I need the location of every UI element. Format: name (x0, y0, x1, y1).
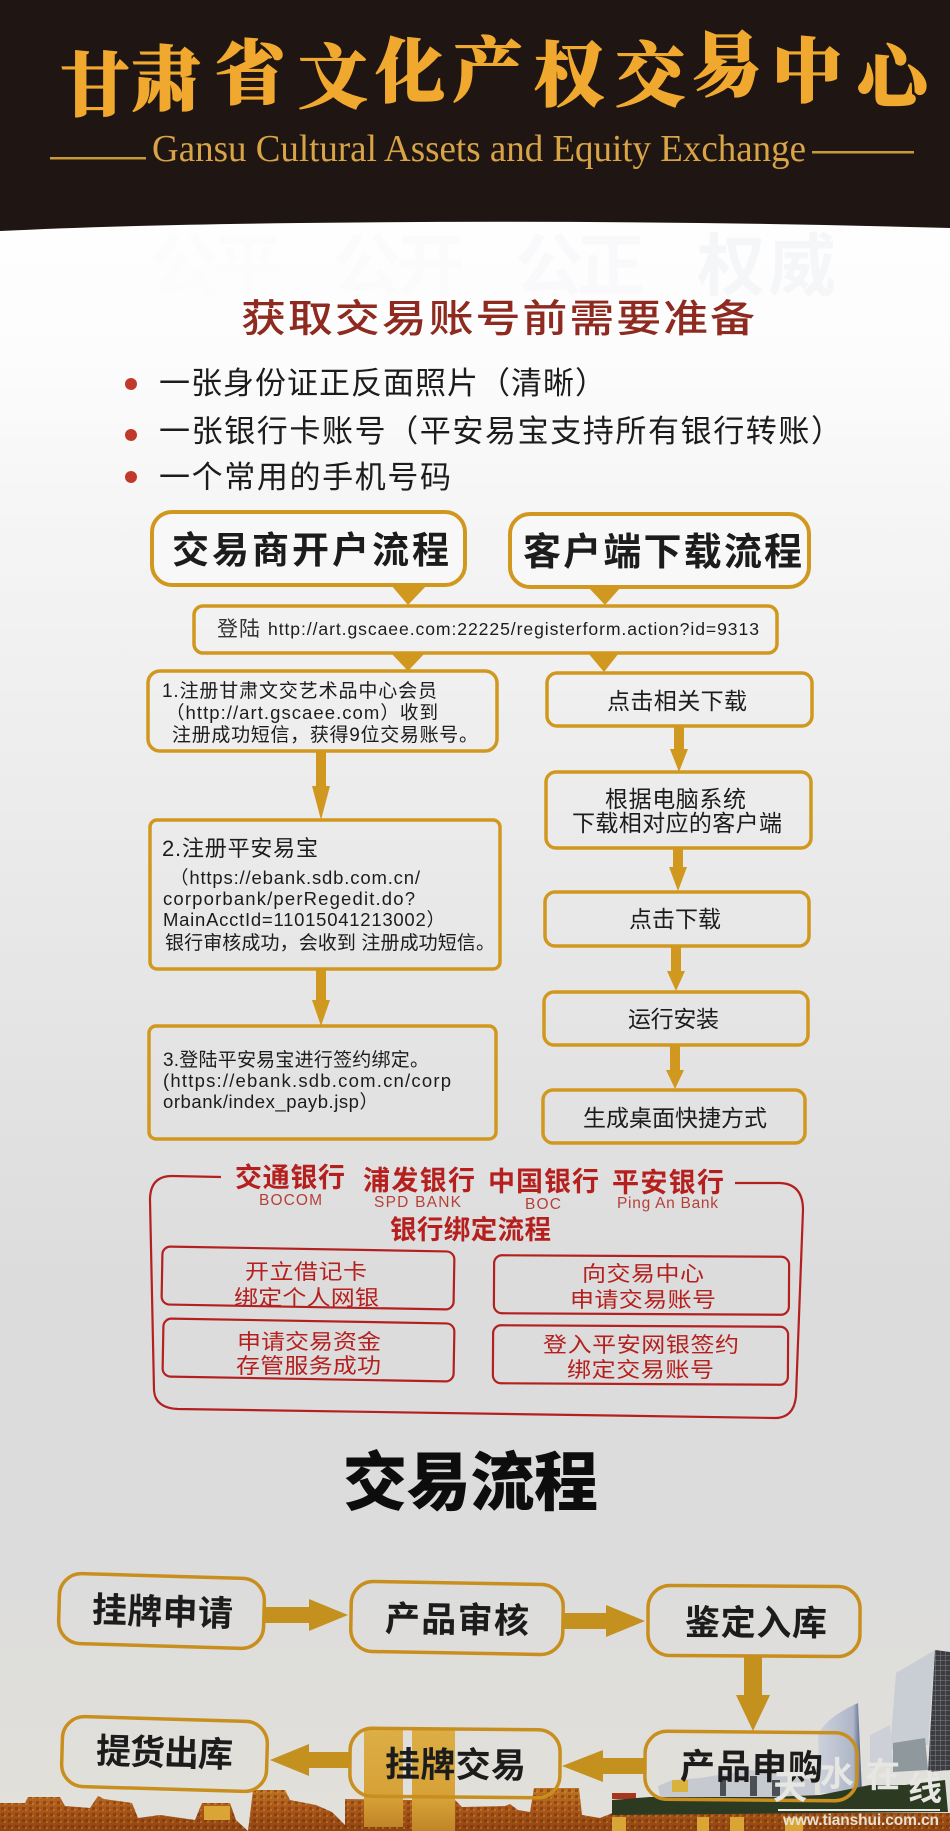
bank step: open debit card: 绑定个人网银 (234, 1286, 379, 1310)
step 2 box: MainAcctId=11015041213002） (163, 909, 445, 930)
box: product review: 产品审核 (385, 1600, 529, 1641)
box: listing application (58, 1573, 265, 1649)
watermark slogan: 公正 (515, 229, 645, 305)
preparation list (125, 366, 842, 495)
title: Chinese name: 甘肃省文化产权交易中心 (60, 10, 938, 131)
arrow: step 2 to step 3 (312, 969, 330, 1026)
box: listing application: 挂牌申请 (91, 1591, 234, 1634)
dark tower grid (928, 1650, 950, 1772)
watermark slogan: 权威 (697, 229, 836, 305)
step 3 box: orbank/index_payb.jsp） (163, 1091, 378, 1113)
watermark characters: 天水在线 (773, 1756, 942, 1808)
arrow: download 4 to 5 (666, 1045, 684, 1089)
white low buildings (658, 1770, 815, 1797)
trading flow diagram (58, 1573, 860, 1801)
low glass block (893, 1738, 928, 1772)
arrow: download 3 to 4 (667, 946, 685, 991)
twin towers (364, 1730, 455, 1831)
tree strip (612, 1780, 948, 1815)
download step 4 (544, 992, 808, 1045)
red band (612, 1793, 636, 1799)
arrow: login to download step (588, 653, 619, 672)
bank step: sign and bind: 绑定交易账号 (567, 1358, 714, 1382)
panel: bank binding (150, 1163, 803, 1418)
box: product subscription (645, 1731, 857, 1801)
download step 3 (545, 892, 809, 946)
box: appraisal storage (648, 1585, 860, 1657)
bank names: 平安银行 (612, 1168, 724, 1198)
small gray tower (870, 1725, 893, 1768)
step 2 box: 2.注册平安易宝 (162, 836, 318, 861)
box: delivery out: 提货出库 (95, 1732, 234, 1775)
login box (194, 606, 777, 653)
arrow: application to review (265, 1599, 348, 1631)
box: listing trading: 挂牌交易 (385, 1745, 526, 1786)
header box: client download: 客户端下载流程 (523, 532, 802, 574)
box: product subscription: 产品申购 (680, 1747, 823, 1788)
login box: 登陆 (217, 618, 260, 641)
step 1 box: 注册成功短信，获得9位交易账号。 (172, 724, 478, 746)
arrow: step 1 to step 2 (312, 751, 330, 820)
watermark slogan: 公平 (150, 229, 282, 305)
bank names: 中国银行 (488, 1167, 599, 1197)
bank English names: Ping An Bank (617, 1195, 718, 1212)
header box: account opening (152, 512, 465, 585)
download step 5: 生成桌面快捷方式 (583, 1105, 767, 1131)
step 2 box: 银行审核成功，会收到 注册成功短信。 (165, 932, 495, 954)
download step 2: 根据电脑系统 (605, 786, 746, 812)
download step 1 (547, 673, 812, 726)
glass building right (890, 1650, 935, 1750)
panel outline (150, 1176, 803, 1418)
header band (0, 0, 950, 231)
bank step: open debit card: 开立借记卡 (245, 1260, 367, 1284)
site watermark (773, 1756, 942, 1829)
panel title: 银行绑定流程 (390, 1215, 551, 1245)
heading: trading flow: 交易流程 (343, 1447, 598, 1519)
bullet item 1: 一张身份证正反面照片（清晰） (159, 366, 606, 401)
download step 5 (543, 1090, 805, 1143)
watermark slogan (150, 229, 836, 305)
box: listing trading (350, 1728, 560, 1798)
window texture (0, 1788, 950, 1831)
bank English names: BOC (525, 1196, 561, 1213)
step 1 box: 1.注册甘肃文交艺术品中心会员 (162, 680, 437, 702)
highlighted building (204, 1806, 230, 1820)
skyline illustration (0, 1650, 950, 1831)
step 3 box: 3.登陆平安易宝进行签约绑定。 (163, 1049, 429, 1071)
bank step: apply account (494, 1255, 789, 1315)
arrow: trading to delivery (270, 1744, 351, 1776)
step 2 box: （https://ebank.sdb.com.cn/ (170, 867, 421, 888)
arrow: left header to login (391, 585, 427, 605)
header box: account opening: 交易商开户流程 (172, 530, 449, 571)
bank step: open debit card (162, 1246, 454, 1310)
step 2 box (150, 820, 500, 969)
orange city skyline (0, 1788, 950, 1831)
header box: client download (510, 514, 809, 587)
dark tower (928, 1650, 950, 1772)
flow: account opening and client download (148, 512, 812, 1143)
bank English names: SPD BANK (374, 1194, 462, 1211)
bank step: custody service (163, 1318, 454, 1382)
bank names (235, 1163, 724, 1198)
watermark rule (778, 1809, 940, 1811)
step 1 box (148, 671, 497, 751)
title: English name: Gansu Cultural Assets and Equity Exchange (152, 128, 806, 170)
arrow: download 2 to 3 (669, 848, 687, 891)
arrow: download 1 to 2 (670, 726, 688, 772)
bank step: apply account: 向交易中心 (582, 1262, 704, 1286)
login box: http://art.gscaee.com:22225/registerform.action?id=9313 (268, 619, 759, 639)
watermark url: www.tianshui.com.cn (782, 1812, 939, 1829)
dark small blocks (720, 1776, 780, 1796)
bullet item 3: 一个常用的手机号码 (159, 460, 451, 495)
download step 2: 下载相对应的客户端 (572, 810, 782, 836)
yellow patches (612, 1817, 803, 1831)
step 3 box (149, 1026, 496, 1139)
bank step: sign and bind (493, 1325, 788, 1385)
bank step: sign and bind: 登入平安网银签约 (543, 1333, 739, 1357)
arrow: storage to subscription (736, 1657, 770, 1731)
box: product review (350, 1581, 564, 1655)
bullet item 2: 一张银行卡账号（平安易宝支持所有银行转账） (159, 414, 842, 449)
download step 3: 点击下载 (629, 906, 721, 932)
yellow small block (672, 1780, 688, 1792)
bank step: apply account: 申请交易账号 (570, 1288, 716, 1312)
bank English names: BOCOM (259, 1192, 322, 1209)
curved glass building (818, 1703, 862, 1793)
step 2 box: corporbank/perRegedit.do? (163, 888, 415, 909)
download step 4: 运行安装 (628, 1006, 719, 1032)
step 1 box: （http://art.gscaee.com）收到 (166, 702, 438, 723)
watermark slogan: 公开 (333, 229, 465, 305)
bank step: custody service: 申请交易资金 (237, 1330, 381, 1354)
bank names: 浦发银行 (363, 1166, 475, 1196)
heading: preparation: 获取交易账号前需要准备 (241, 297, 755, 340)
box: delivery out (61, 1716, 268, 1792)
download step 2 (546, 772, 811, 848)
download step 1: 点击相关下载 (607, 688, 747, 714)
arrow: right header to login (588, 587, 621, 605)
arrow: review to storage (563, 1605, 645, 1637)
bank step: custody service: 存管服务成功 (236, 1354, 381, 1378)
box: appraisal storage: 鉴定入库 (685, 1604, 827, 1643)
arrow: subscription to trading (562, 1750, 645, 1782)
bank names: 交通银行 (235, 1163, 345, 1193)
arrow: login to step 1 (391, 653, 425, 671)
step 3 box: (https://ebank.sdb.com.cn/corp (163, 1070, 451, 1091)
bank English names (259, 1192, 718, 1213)
